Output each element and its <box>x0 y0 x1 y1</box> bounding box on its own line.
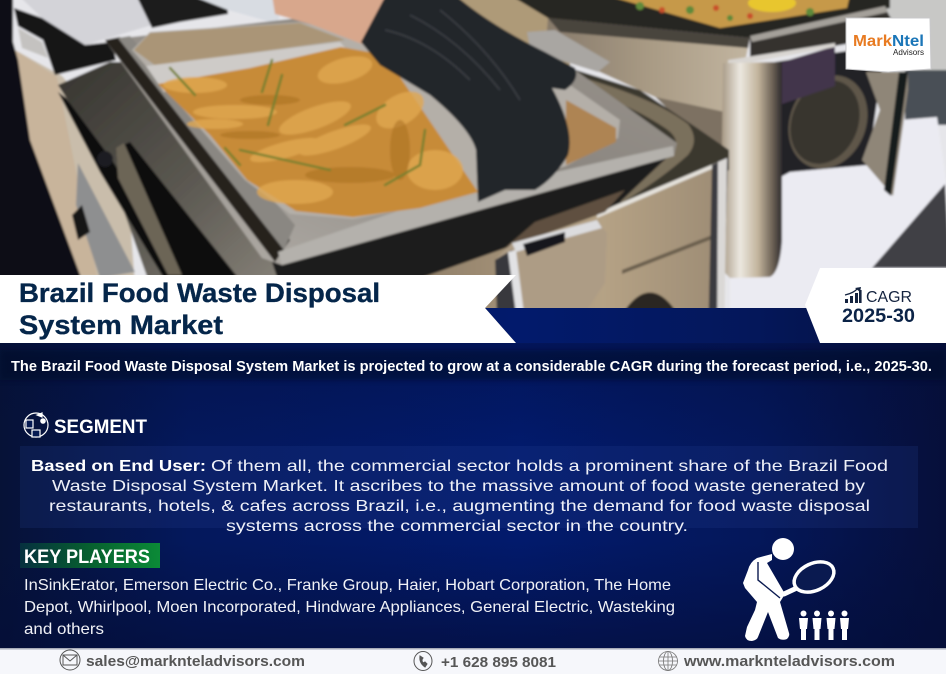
back chafer dark rim <box>510 0 890 38</box>
CAGR period: 2025-30 <box>842 306 915 327</box>
glove top left and cuff <box>136 0 228 28</box>
lid handle <box>527 30 610 72</box>
logo: MarkNtel Advisors: Advisors <box>893 48 924 57</box>
subtitle band: The Brazil Food Waste Disposal System Market is projected to grow at a considerable CAGR during the forecast period, i.e., 2025-30. <box>11 359 932 375</box>
back chafer right leg <box>862 72 908 196</box>
near chafer: outer stainless body <box>415 158 728 345</box>
pan rim <box>105 18 677 265</box>
subtitle band <box>0 350 946 380</box>
email: sales@marknteladvisors.com <box>86 653 305 670</box>
icon: segment globe <box>24 413 48 437</box>
logo: MarkNtel Advisors <box>846 18 931 72</box>
title text: System Market <box>19 310 223 340</box>
back chafer dark legs <box>775 45 885 180</box>
key players list: Depot, Whirlpool, Moen Incorporated, Hindware Appliances, General Electric, Wasteking <box>24 599 675 616</box>
panel: segment description: restaurants, hotels, & cafes across Brazil, i.e., augmenting the demand for food waste disposal <box>49 498 870 515</box>
blue background panel <box>0 308 946 648</box>
small people <box>799 610 849 640</box>
logo: MarkNtel Advisors: Mark <box>853 33 892 50</box>
title text <box>19 278 380 340</box>
pan inner wall <box>132 22 620 219</box>
logo: MarkNtel Advisors: Ntel <box>892 33 924 50</box>
panel: segment description: Based on End User: <box>31 458 206 475</box>
glove <box>361 0 576 202</box>
heading: segment: SEGMENT <box>54 417 147 438</box>
icon: person with magnifier and small people <box>743 538 849 641</box>
arm <box>272 0 392 44</box>
key players list: and others <box>24 621 104 638</box>
white cloth top left <box>18 0 152 45</box>
left dark garment <box>0 0 82 280</box>
panel: segment description: systems across the commercial sector in the country. <box>226 518 688 535</box>
right pan sauce <box>566 100 616 165</box>
title banner <box>0 275 516 343</box>
near chafer: side panel <box>58 62 300 285</box>
right background <box>880 0 946 73</box>
black rail <box>58 92 188 280</box>
phone number: +1 628 895 8081 <box>441 654 556 671</box>
title text: Brazil Food Waste Disposal <box>19 278 380 308</box>
back chafer body <box>545 18 750 112</box>
back chafer pillar <box>722 62 782 278</box>
floor <box>15 50 135 285</box>
chrome handle <box>495 220 607 345</box>
near chafer: dark front of pan <box>272 150 675 280</box>
footer bar <box>0 648 946 674</box>
white table cloth <box>730 117 946 345</box>
food <box>158 47 478 217</box>
photo: chafing dishes with food <box>0 0 946 345</box>
icon: globe <box>658 651 678 671</box>
panel: segment description: Waste Disposal System Market. It ascribes to the massive amount of food waste generated by <box>52 478 865 495</box>
key players list <box>24 577 675 638</box>
icon: mail <box>60 650 80 670</box>
heading: key players: KEY PLAYERS <box>24 547 150 568</box>
website: www.marknteladvisors.com <box>683 653 895 670</box>
back wall between dishes <box>440 0 570 75</box>
icon: phone <box>414 652 432 670</box>
black box top left <box>14 8 116 75</box>
CAGR label: CAGR <box>866 289 912 306</box>
panel: segment description <box>20 446 918 535</box>
icon: growth chart <box>845 287 862 303</box>
key players list: InSinkErator, Emerson Electric Co., Franke Group, Haier, Hobart Corporation, The Home <box>24 577 671 594</box>
panel: segment description: Of them all, the commercial sector holds a prominent share of the Brazil Food <box>211 458 888 475</box>
back chafer food <box>605 0 850 28</box>
near chafer: back wall and olive band <box>560 65 729 220</box>
CAGR badge <box>805 268 946 343</box>
drape <box>872 184 946 268</box>
recessed handle <box>116 142 240 280</box>
